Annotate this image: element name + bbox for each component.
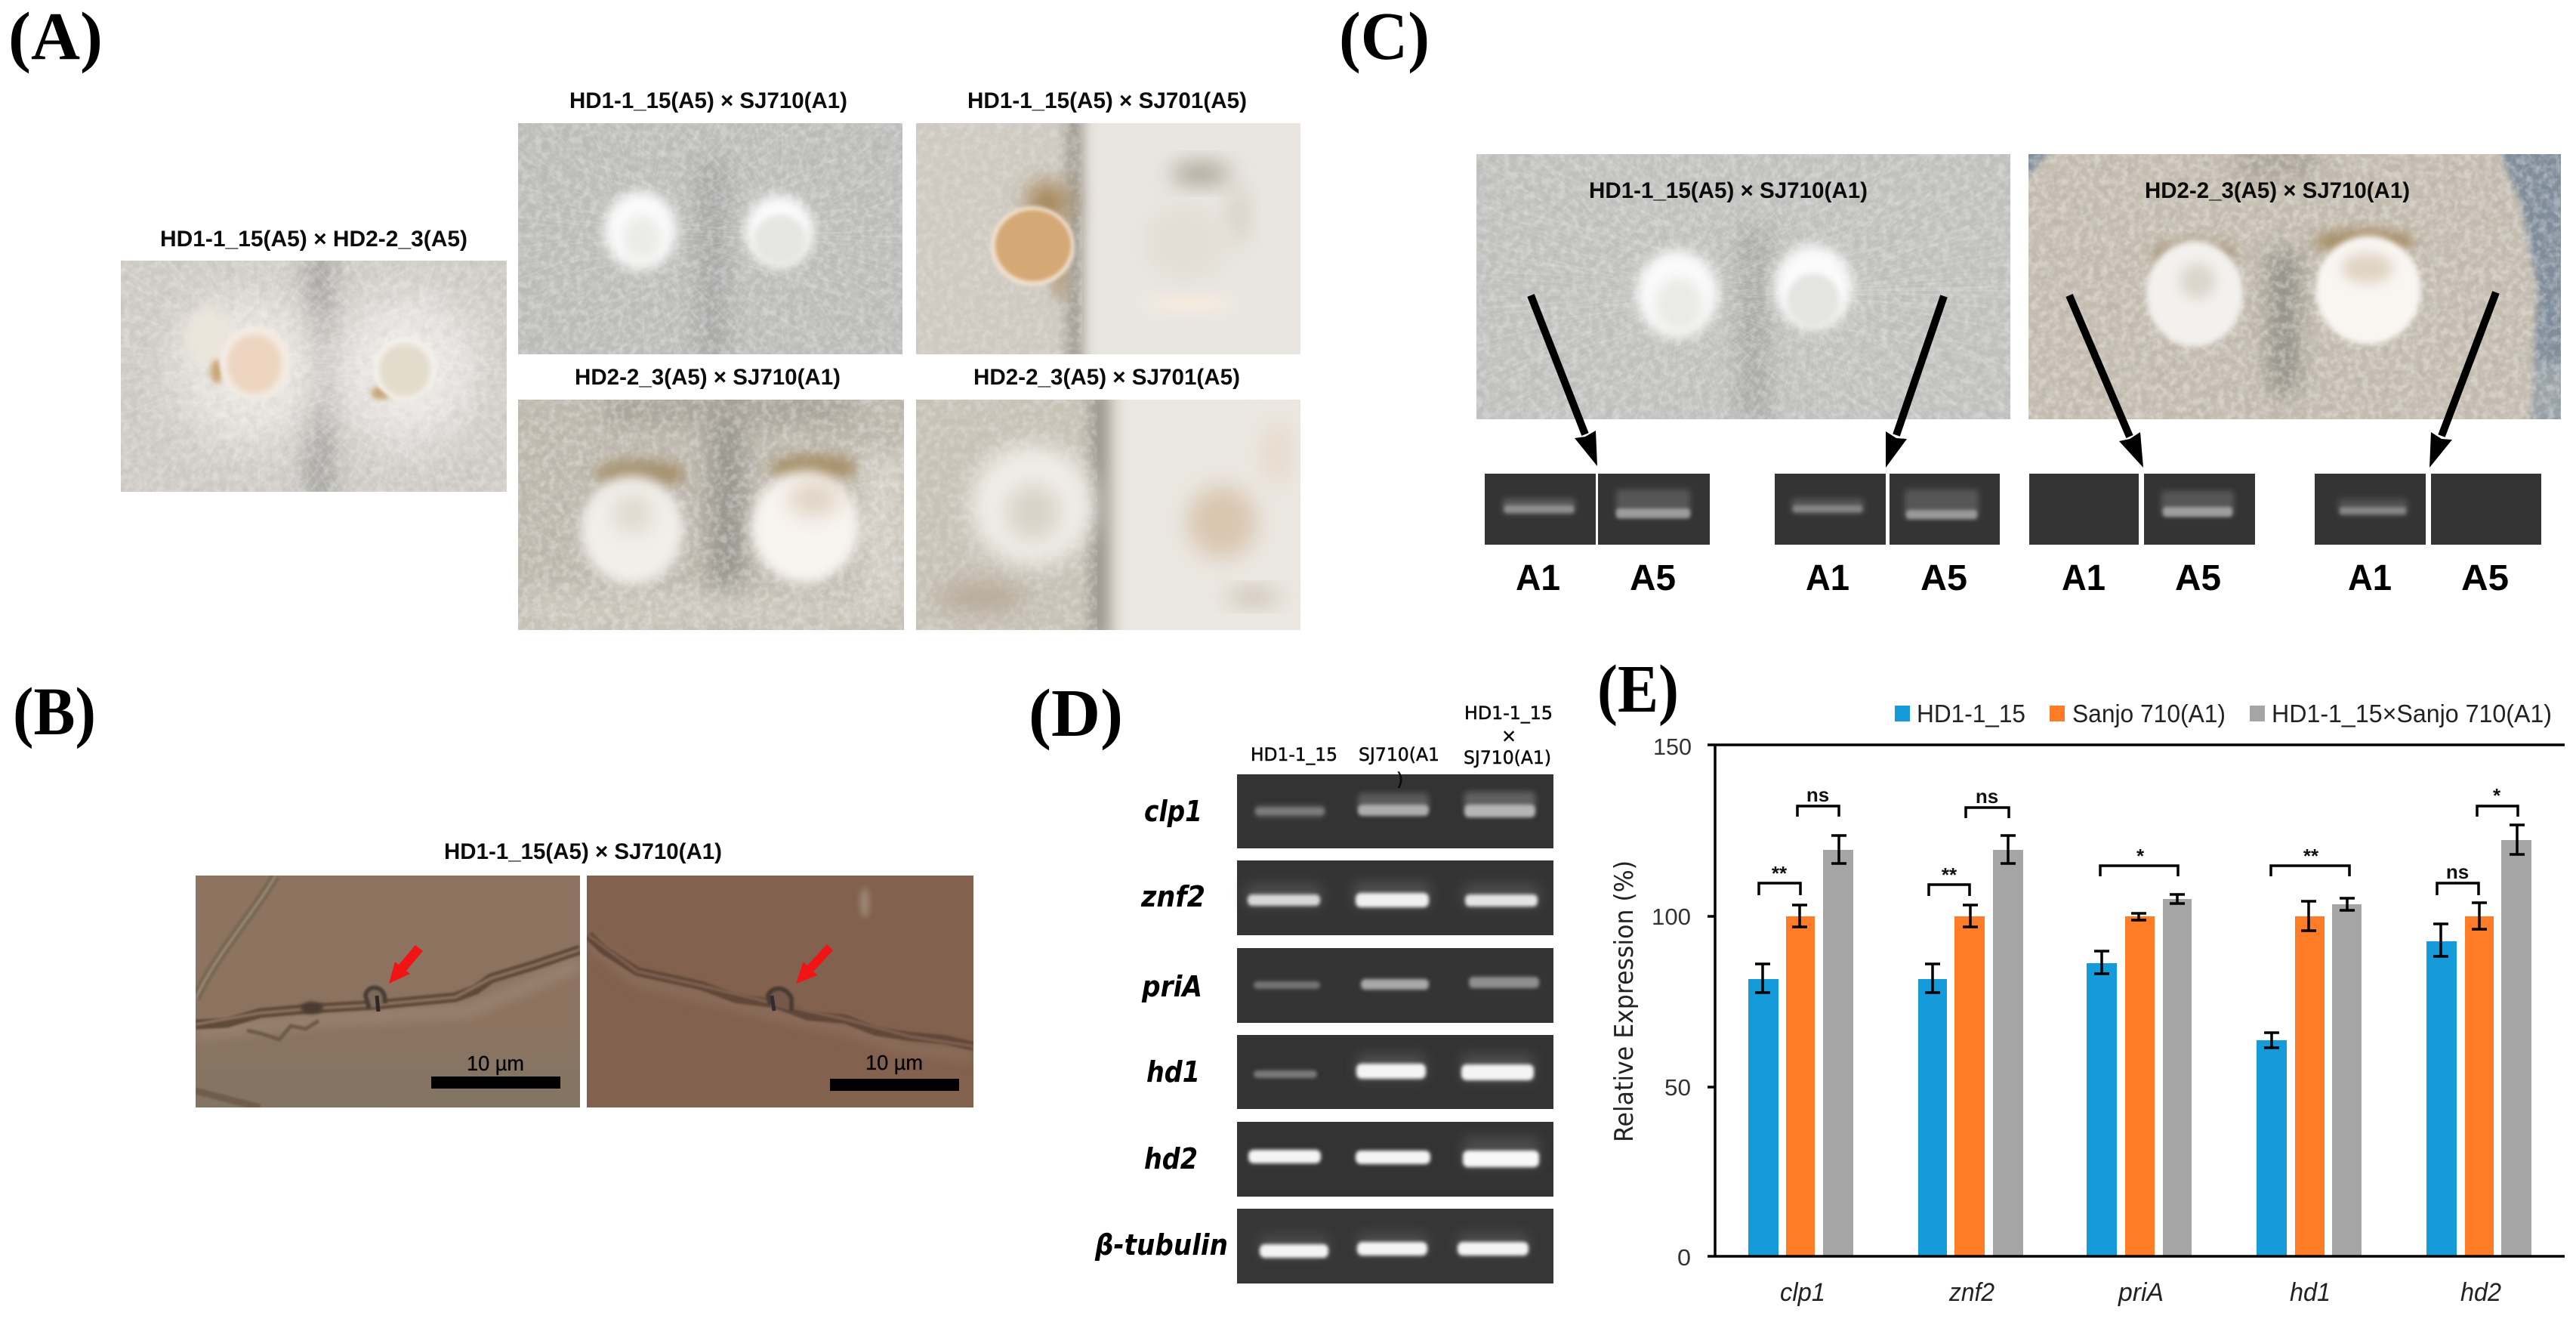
- gene label: hd1: hd1: [1146, 1055, 1200, 1089]
- gel lane labels: A5: [2461, 558, 2509, 598]
- legend: [1895, 700, 2552, 727]
- y tick labels: 100: [1652, 904, 1691, 930]
- significance brackets: [1759, 806, 2518, 896]
- arrow: colony sample 1 to gel: [1531, 295, 1597, 466]
- gel: priA: [1237, 948, 1553, 1023]
- micrograph: right: [587, 876, 973, 1107]
- panel label: C: (C): [1339, 0, 1430, 74]
- significance labels: ns: [2446, 860, 2469, 883]
- bars: hd1: [2257, 904, 2362, 1256]
- y axis label: Relative Expression (%): [1609, 860, 1640, 1142]
- x axis gene labels: znf2: [1948, 1278, 1994, 1307]
- label on photo: HD2-2_3(A5) × SJ710(A1): [2145, 178, 2410, 203]
- x axis gene labels: priA: [2118, 1278, 2164, 1307]
- panel: D gene expression gels: [1094, 703, 1553, 1283]
- gel: znf2: [1237, 860, 1553, 935]
- label on photo: HD1-1_15(A5) × SJ710(A1): [1589, 178, 1868, 203]
- gene label: znf2: znf2: [1140, 880, 1205, 913]
- panel label: E: (E): [1597, 652, 1679, 727]
- arrow: colony sample 3 to gel: [2069, 295, 2143, 468]
- column headers: HD1-1_15: [1464, 703, 1553, 724]
- x axis gene labels: hd1: [2290, 1278, 2331, 1307]
- panel: B microscopy: [196, 839, 973, 1107]
- photo: C HD2-2_3 x SJ710: [2028, 154, 2561, 419]
- gel: beta-tubulin: [1237, 1209, 1553, 1283]
- significance labels: **: [2303, 845, 2319, 867]
- panel label: D: (D): [1029, 676, 1123, 751]
- bars: znf2: [1918, 850, 2023, 1256]
- x axis gene labels: [1780, 1278, 2501, 1307]
- bars: hd2: [2426, 840, 2531, 1256]
- significance labels: *: [2493, 784, 2501, 807]
- gel lane labels: A5: [1920, 558, 1967, 598]
- gel: hd1: [1237, 1035, 1553, 1109]
- bars: priA: [2087, 899, 2192, 1256]
- photo: HD1-1_15 x SJ710: [518, 123, 902, 354]
- column headers: ): [1396, 769, 1403, 790]
- column headers: SJ710(A1: [1359, 744, 1439, 765]
- gel lane labels: A1: [2062, 558, 2106, 598]
- legend: HD1-1_15×Sanjo 710(A1): [2272, 700, 2552, 727]
- photo: HD1-1_15 x HD2-2_3: [121, 261, 507, 492]
- scale bar: left: 10 µm: [467, 1052, 524, 1075]
- arrow: red left: [389, 945, 423, 984]
- column headers: ×: [1501, 725, 1516, 746]
- gel lane labels: A1: [2348, 558, 2392, 598]
- photo: HD2-2_3 x SJ710: [518, 400, 904, 630]
- panel: C photographs, gels and arrows: [1476, 124, 2568, 598]
- gel lane labels: [1516, 558, 2509, 598]
- legend: Sanjo 710(A1): [2072, 700, 2226, 727]
- gel set: A1 / A5 lanes: [1485, 474, 2541, 545]
- arrow: red right: [796, 944, 833, 984]
- y tick labels: 150: [1653, 734, 1692, 760]
- x axis gene labels: hd2: [2460, 1278, 2501, 1307]
- scale bar: right: [830, 1051, 959, 1091]
- axes: [1708, 745, 2565, 1256]
- significance labels: **: [1942, 863, 1957, 886]
- gel lane labels: A1: [1516, 558, 1560, 598]
- column headers: SJ710(A1): [1464, 747, 1551, 768]
- photo: HD2-2_3 x SJ701: [916, 400, 1300, 630]
- gel lane labels: A5: [2175, 558, 2221, 598]
- significance labels: [1772, 783, 2501, 886]
- significance labels: ns: [1976, 785, 1998, 808]
- micrograph: left: [196, 876, 580, 1107]
- heading: HD1-1_15 x SJ701: HD1-1_15(A5) × SJ701(A5): [967, 88, 1247, 113]
- photo: HD1-1_15 x SJ701: [916, 123, 1300, 354]
- y tick labels: [1652, 734, 1692, 1271]
- gel lane labels: A1: [1806, 558, 1849, 598]
- gene label: hd2: hd2: [1144, 1142, 1198, 1175]
- panel label: B: (B): [13, 675, 96, 749]
- significance labels: ns: [1806, 783, 1829, 806]
- gene label: clp1: clp1: [1144, 795, 1202, 828]
- error bars: [1755, 825, 2525, 1048]
- arrow: colony sample 2 to gel: [1886, 296, 1944, 468]
- column headers: [1251, 703, 1553, 790]
- column headers: HD1-1_15: [1251, 744, 1337, 765]
- gel: clp1: [1237, 774, 1553, 848]
- arrow: colony sample 4 to gel: [2429, 292, 2496, 468]
- heading: HD1-1_15 x HD2-2_3: HD1-1_15(A5) × HD2-2_3(A5): [160, 227, 467, 252]
- y tick labels: 50: [1664, 1074, 1691, 1101]
- gel: hd2: [1237, 1122, 1553, 1197]
- significance labels: *: [2136, 845, 2145, 867]
- gel lane labels: A5: [1630, 558, 1676, 598]
- heading: B: HD1-1_15(A5) × SJ710(A1): [444, 839, 722, 864]
- panel label: A: (A): [8, 0, 103, 74]
- scale bar: right: 10 µm: [865, 1051, 923, 1074]
- legend: HD1-1_15: [1917, 700, 2025, 727]
- photo: C HD1-1_15 x SJ710: [1476, 154, 2010, 419]
- bar chart: relative expression: [1609, 734, 2565, 1307]
- heading: HD2-2_3 x SJ710: HD2-2_3(A5) × SJ710(A1): [575, 365, 841, 390]
- gene label: priA: priA: [1141, 970, 1202, 1003]
- y tick labels: 0: [1677, 1244, 1691, 1271]
- scale bar: left: [431, 1052, 560, 1089]
- panel: A confrontation photographs: [121, 88, 1314, 646]
- heading: HD2-2_3 x SJ701: HD2-2_3(A5) × SJ701(A5): [973, 365, 1240, 390]
- gene label: beta-tubulin: β-tubulin: [1094, 1228, 1228, 1262]
- bars: clp1: [1748, 850, 1853, 1256]
- x axis gene labels: clp1: [1780, 1278, 1825, 1307]
- significance labels: **: [1772, 862, 1788, 885]
- heading: HD1-1_15 x SJ710: HD1-1_15(A5) × SJ710(A1): [569, 88, 847, 113]
